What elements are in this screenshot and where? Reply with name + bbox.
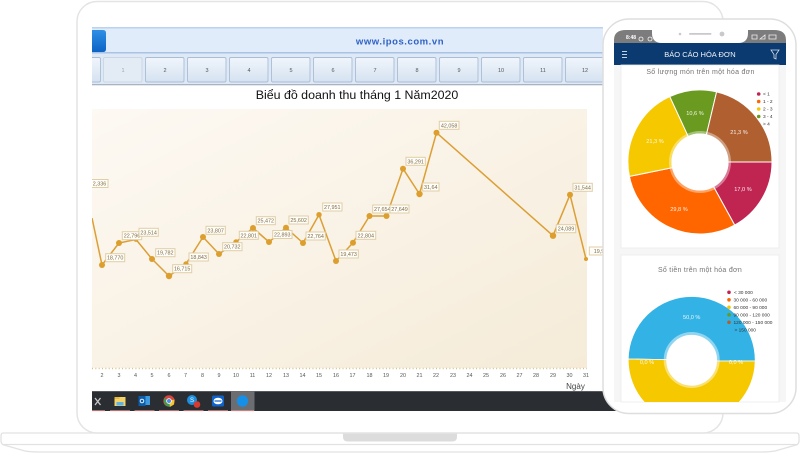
x axis: 25 (483, 373, 489, 379)
data labels: 27,654 (374, 207, 391, 213)
revenue line series (88, 121, 609, 279)
donut chart: 10,6 % (686, 111, 704, 117)
x axis: 19 (383, 373, 389, 379)
data labels: 36,291 (407, 159, 424, 165)
x axis: 23 (450, 373, 456, 379)
x axis: 27 (516, 373, 522, 379)
month tabs: 12 (582, 68, 588, 74)
donut chart: 21,3 % (646, 139, 664, 145)
legend: 90 000 - 120 000 (734, 312, 770, 318)
month tabs: 6 (331, 68, 335, 74)
x axis: 26 (500, 373, 506, 379)
status bar (614, 29, 786, 43)
donut chart: 0,0 % (640, 360, 654, 366)
month tabs: 3 (205, 68, 209, 74)
month tabs: 11 (540, 68, 546, 74)
month tabs: 1 (121, 68, 125, 74)
icon: app (237, 395, 248, 407)
legend: 3 - 4 (763, 114, 773, 120)
x axis: 21 (416, 373, 422, 379)
x axis: 15 (316, 373, 322, 379)
legend: < 1 (763, 92, 770, 98)
x axis: 9 (218, 373, 220, 379)
legend: 30 000 - 60 000 (734, 298, 767, 304)
notch (652, 29, 748, 43)
laptop screen (80, 27, 622, 411)
donut chart: 0,0 % (729, 360, 743, 366)
data points (99, 130, 588, 279)
x axis: 10 (233, 373, 239, 379)
donut chart: 17,0 % (734, 187, 752, 193)
x axis: 7 (184, 373, 187, 379)
data labels: 42,058 (441, 123, 457, 129)
x axis (92, 368, 589, 379)
x axis: 30 (566, 373, 572, 379)
icon: outlook (138, 396, 150, 406)
data labels: 22,796 (124, 234, 140, 240)
month tabs: 4 (247, 68, 251, 74)
x axis: 17 (350, 373, 356, 379)
icon: teamviewer (212, 396, 224, 406)
card: items per invoice (621, 65, 779, 248)
laptop notch (343, 433, 457, 442)
x axis: 24 (466, 373, 472, 379)
phone (603, 19, 796, 424)
card heading: Số tiền trên một hóa đơn (658, 265, 742, 274)
icon: chrome (163, 395, 175, 407)
data labels: 22,801 (241, 233, 257, 239)
data labels: 19,782 (157, 251, 174, 257)
speaker and camera (679, 32, 724, 36)
data labels: 24,089 (558, 227, 574, 233)
legend: > 4 (763, 122, 770, 128)
legend (727, 290, 773, 334)
x axis: 6 (168, 373, 170, 379)
x axis: 28 (533, 373, 539, 379)
phone body (603, 19, 796, 414)
data labels: 2,336 (93, 182, 106, 188)
screen background (614, 43, 786, 402)
month tabs: 2 (163, 68, 167, 74)
website url: www.ipos.com.vn (355, 36, 444, 48)
donut chart: 29,8 % (670, 207, 688, 213)
legend: 1 - 2 (763, 99, 773, 105)
x axis: 8 (201, 373, 204, 379)
chart plot background (92, 109, 587, 368)
x axis: 2 (100, 373, 104, 379)
donut chart: 50,0 % (683, 315, 700, 321)
icon: skype badge (187, 395, 200, 408)
data labels: 23,514 (140, 230, 157, 236)
clock: 8:48 (626, 35, 636, 41)
data labels: 19,473 (340, 252, 357, 258)
legend: 2 - 3 (763, 107, 773, 113)
data labels: 25,472 (258, 219, 274, 225)
app bar (614, 43, 786, 65)
data labels: 22,804 (358, 233, 374, 239)
laptop lid (77, 2, 723, 433)
x axis: 12 (266, 373, 272, 379)
legend: < 30 000 (734, 290, 753, 296)
app icon (92, 30, 106, 52)
month tabs: 5 (289, 68, 293, 74)
x axis: 29 (550, 373, 556, 379)
data labels: 31,544 (574, 185, 591, 191)
data labels: 27,951 (324, 205, 341, 211)
data labels: 27,649 (391, 207, 408, 213)
x axis: 3 (118, 373, 120, 379)
taskbar (92, 391, 622, 411)
x axis: 5 (150, 373, 154, 379)
legend: 60 000 - 90 000 (734, 305, 767, 311)
x axis: 22 (433, 373, 439, 379)
data labels: 22,893 (274, 232, 291, 238)
data labels: 16,715 (174, 267, 190, 273)
x axis: 18 (366, 373, 372, 379)
icon: skype badge: S (190, 398, 194, 404)
donut chart (628, 90, 772, 234)
month tabs: 8 (415, 68, 419, 74)
data labels: 25,602 (290, 218, 307, 224)
active app highlight (231, 391, 254, 411)
data labels: 20,732 (224, 245, 241, 251)
data labels: 18,770 (107, 256, 123, 262)
card: amount per invoice (620, 255, 780, 402)
month tabs (80, 54, 604, 85)
month tabs: 10 (498, 68, 504, 74)
legend: > 150 000 (734, 328, 756, 334)
data labels: 23,807 (207, 228, 224, 234)
x axis: 20 (400, 373, 406, 379)
donut chart: 21,3 % (730, 130, 748, 136)
month tabs: 7 (373, 68, 377, 74)
x axis: 4 (134, 373, 137, 379)
data labels: 18,843 (190, 255, 207, 261)
icon: menu (622, 52, 627, 58)
icon: folder (114, 397, 126, 406)
data labels (88, 121, 609, 273)
card heading: Số lượng món trên một hóa đơn (646, 67, 755, 76)
icon: filter (771, 50, 779, 59)
legend (757, 92, 773, 128)
app bar title: BÁO CÁO HÓA ĐƠN (664, 50, 736, 59)
icon: tools (95, 398, 100, 405)
status icons (639, 35, 776, 41)
x axis title: Ngày (566, 382, 585, 391)
donut chart (628, 296, 755, 402)
chart title: Biểu đồ doanh thu tháng 1 Năm2020 (256, 88, 458, 102)
browser header (92, 27, 603, 54)
x axis: 11 (250, 373, 255, 379)
month tabs: 9 (457, 68, 461, 74)
legend: 120 000 - 150 000 (734, 320, 773, 326)
x axis: 31 (583, 373, 589, 379)
x axis: 13 (283, 373, 289, 379)
laptop base (1, 433, 799, 452)
x axis: 16 (333, 373, 339, 379)
data labels: 22,764 (307, 234, 324, 240)
data labels: 19,9 (594, 249, 604, 255)
x axis: 14 (300, 373, 306, 379)
data labels: 31,64 (424, 185, 438, 191)
taskbar indicators (92, 410, 254, 412)
